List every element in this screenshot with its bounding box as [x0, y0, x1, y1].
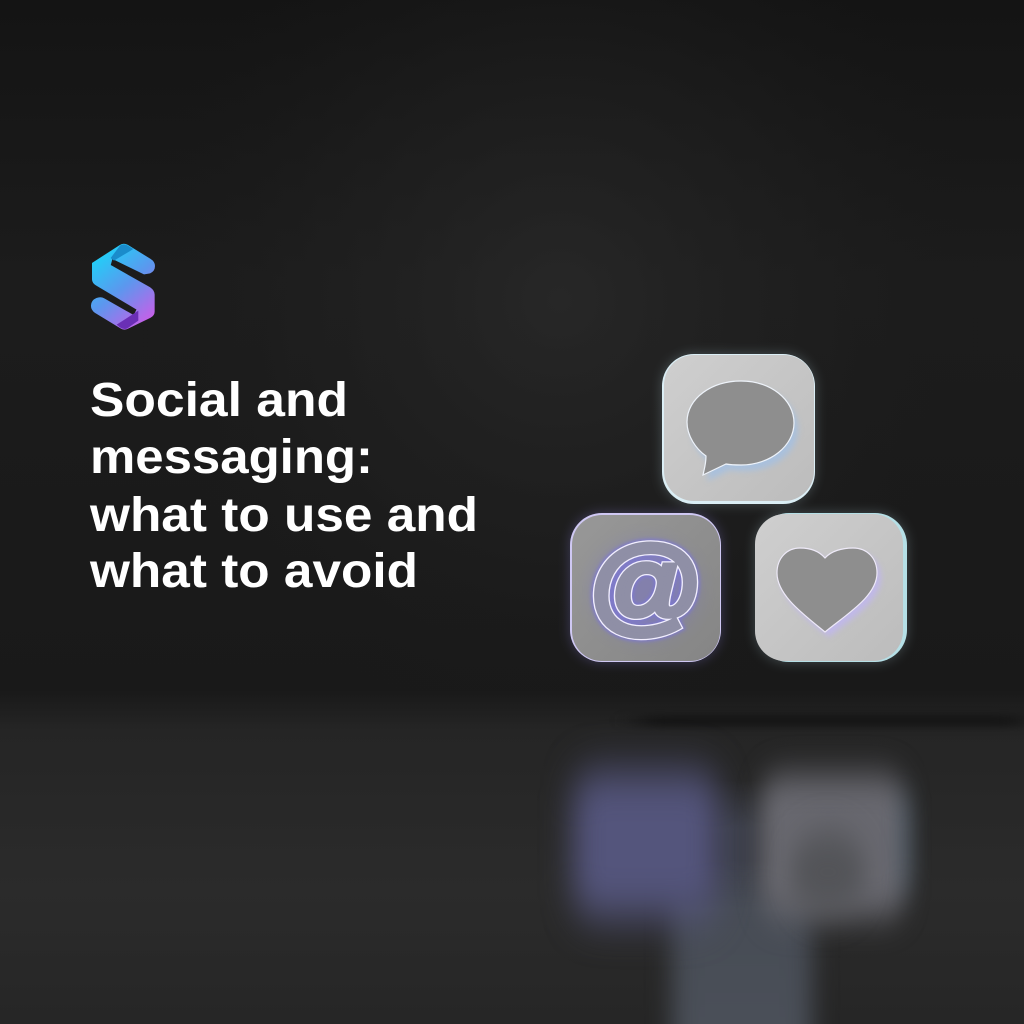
contact shadow under icons	[640, 715, 1024, 727]
background wall	[0, 0, 1024, 700]
title: messaging:	[90, 431, 373, 484]
at sign outline: @	[588, 526, 704, 644]
reflection of icons on floor	[573, 772, 908, 1024]
title	[89, 374, 478, 598]
title: what to avoid	[89, 545, 418, 598]
title: what to use and	[89, 489, 478, 542]
logo top fold	[111, 244, 133, 261]
at sign outline: @	[588, 526, 704, 644]
at sign glow	[595, 544, 695, 636]
speech bubble cutout	[687, 381, 798, 481]
floor	[0, 690, 1024, 1024]
title: Social and	[90, 374, 348, 427]
at sign outline: @	[588, 526, 704, 644]
icon tile: at sign	[570, 513, 721, 662]
logo bottom fold	[117, 311, 138, 329]
icon tile: heart	[755, 513, 907, 662]
icon tile: speech bubble	[662, 354, 815, 504]
brand logo: ribbon S	[92, 244, 154, 329]
heart cutout	[777, 548, 881, 637]
